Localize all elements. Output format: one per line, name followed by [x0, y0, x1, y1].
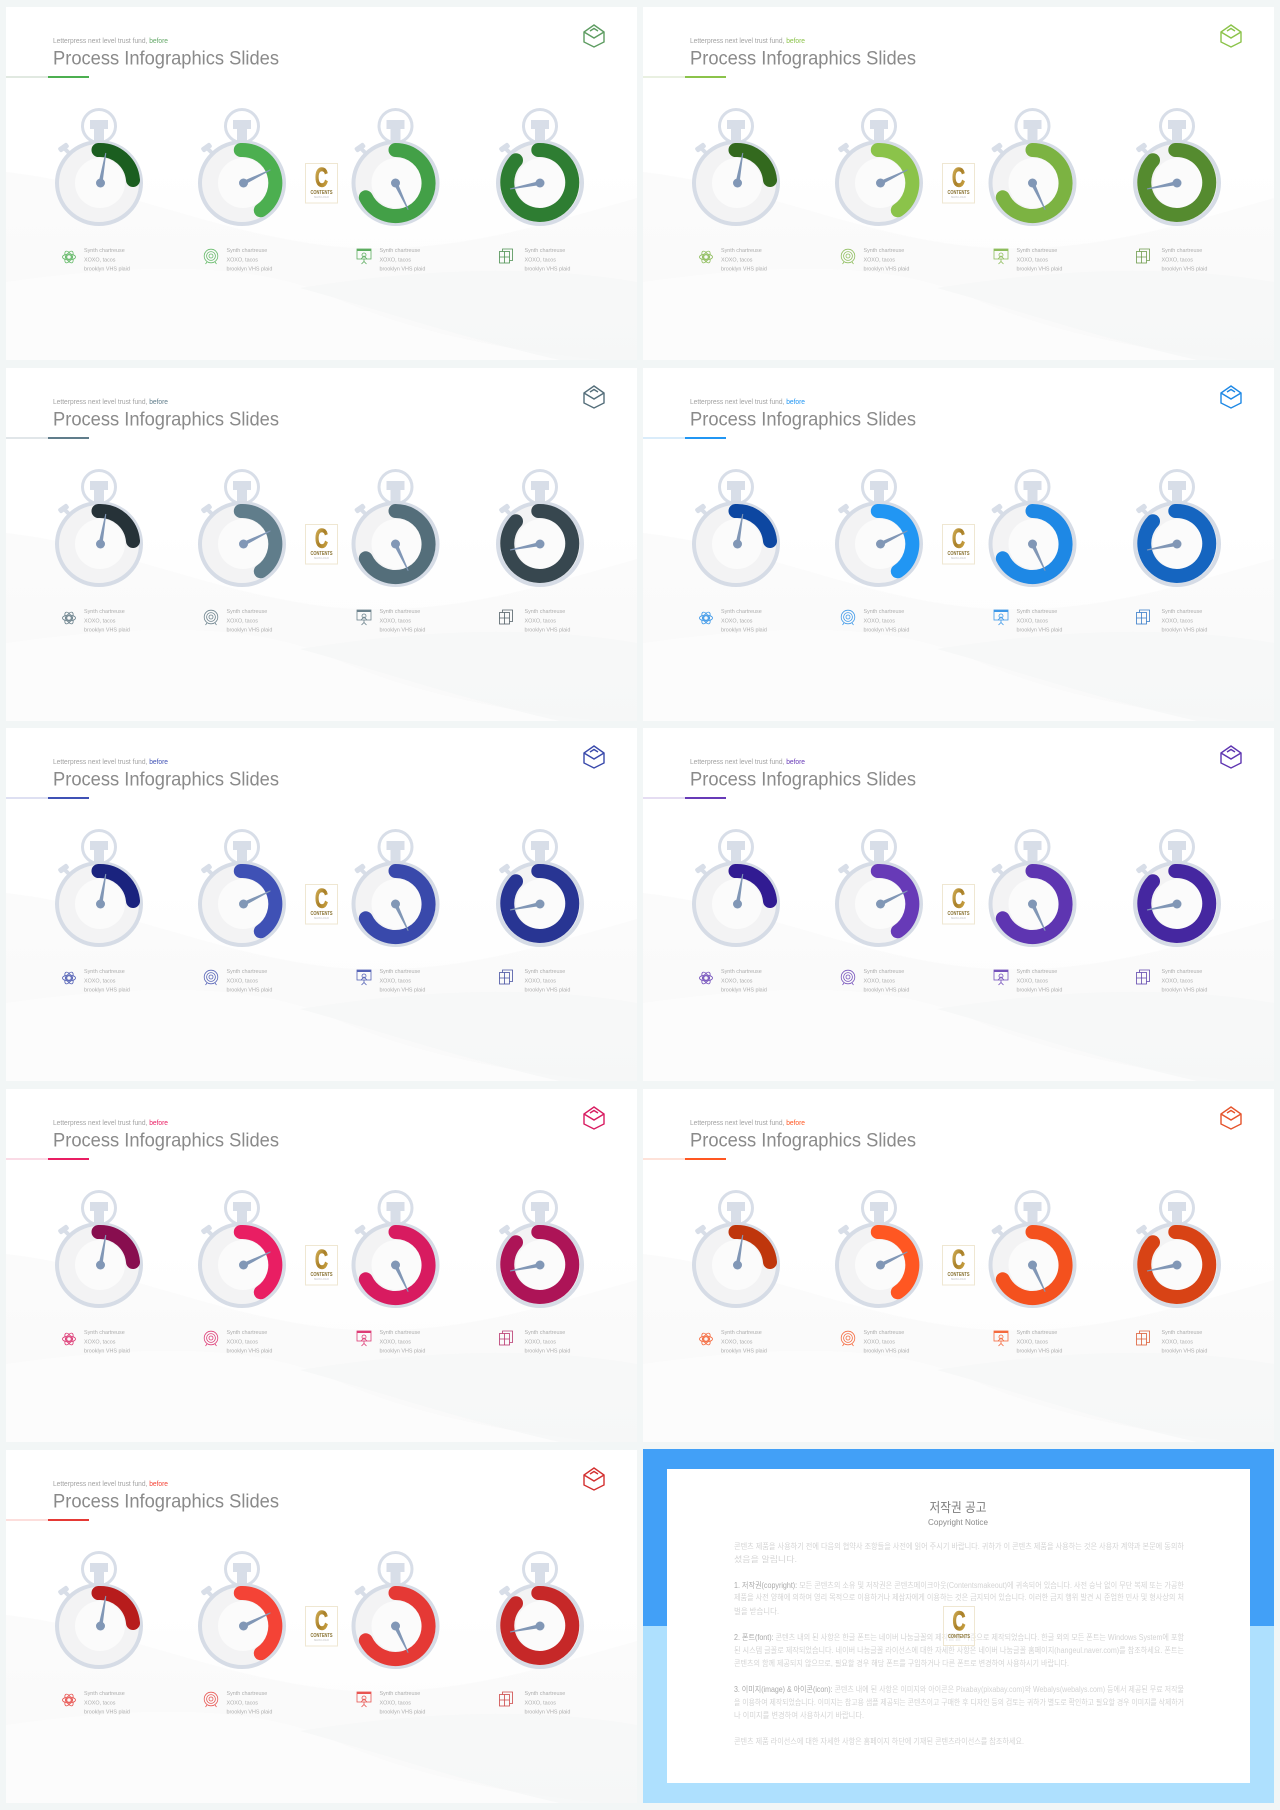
caption 4: brooklyn VHS plaid [1162, 628, 1207, 634]
caption 1: brooklyn VHS plaid [84, 1710, 130, 1716]
contents logo: C [315, 1244, 328, 1274]
icon: atom [62, 611, 76, 625]
caption 4: Synth chartreuse [1162, 609, 1202, 615]
icon: presentation [357, 970, 371, 985]
section 2: font: 된 시스템 글꼴로 제작되었습니다. 네이버 나눔글꼴 라이선스에 대한 자세한 사항은 네이버 나눔글꼴 홈페이지(hangeul.naver.com)를 참조하세요. 폰트는 [734, 1645, 1184, 1655]
icon: presentation [357, 1331, 371, 1346]
icon: layers [1136, 249, 1150, 263]
slide 6: deep purple [643, 728, 1274, 1081]
caption 1: XOXO, tacos [84, 258, 116, 264]
stopwatch 1 [694, 830, 778, 945]
caption 2: XOXO, tacos [226, 978, 258, 984]
caption 3: Synth chartreuse [380, 969, 420, 975]
notice heading: 저작권 공고 [930, 1500, 987, 1515]
caption 2: brooklyn VHS plaid [864, 1348, 909, 1354]
title underline [6, 1158, 89, 1160]
contents logo: MAIN LOGO [314, 556, 329, 560]
title underline [6, 797, 89, 799]
contents logo: C [952, 1244, 965, 1274]
contents logo: C [952, 524, 965, 554]
title: Process Infographics Slides [690, 408, 916, 430]
icon: cube logo [1221, 386, 1241, 408]
title: Process Infographics Slides [53, 1490, 279, 1512]
slide background [643, 728, 1274, 1081]
icon: layers [500, 249, 512, 263]
caption 1: XOXO, tacos [721, 258, 753, 264]
caption 3: XOXO, tacos [380, 1700, 411, 1706]
caption 2: XOXO, tacos [864, 978, 895, 984]
contents logo: C [315, 1606, 328, 1636]
contents logo [306, 884, 338, 924]
caption 3: Synth chartreuse [380, 609, 420, 615]
section 2: font: 2. 폰트(font): 콘텐츠 내의 된 사항은 한글 폰트는 네이버 나눔글꼴의 제작물을 기준으로 제작되었습니다. 한글 외의 모든 폰트는 Windows System에 포함 [734, 1633, 1236, 1642]
stopwatch 2 [837, 830, 921, 945]
stopwatch 3 [990, 470, 1074, 585]
stopwatch 2 [200, 1552, 284, 1667]
icon: layers [500, 610, 512, 624]
caption 3: Synth chartreuse [380, 248, 420, 254]
title: Process Infographics Slides [690, 1130, 916, 1152]
icon: target [204, 610, 218, 625]
contents logo: CONTENTS [310, 1633, 333, 1639]
caption 4: XOXO, tacos [524, 618, 556, 624]
caption 4: XOXO, tacos [1162, 618, 1193, 624]
caption 3: Synth chartreuse [380, 1330, 420, 1336]
icon: atom [700, 971, 712, 985]
subtitle: Letterpress next level trust fund, before [690, 1118, 805, 1127]
icon: target [204, 970, 218, 985]
contents logo: MAIN LOGO [951, 1277, 966, 1281]
contents logo [306, 1606, 338, 1646]
slide background [643, 368, 1274, 721]
caption 2: brooklyn VHS plaid [226, 266, 272, 272]
caption 2: XOXO, tacos [226, 258, 258, 264]
caption 3: brooklyn VHS plaid [1016, 1348, 1062, 1354]
closing line: 콘텐츠 제품 라이선스에 대한 자세한 사항은 홈페이지 하단에 기재된 콘텐츠라이선스를 참조하세요. [734, 1736, 1024, 1746]
icon: layers [1136, 610, 1150, 624]
slide 3: blue gray [6, 368, 637, 721]
icon: atom [700, 611, 712, 625]
caption 4: brooklyn VHS plaid [524, 1348, 570, 1354]
contents logo: CONTENTS [310, 551, 333, 557]
title underline [6, 1519, 89, 1521]
caption 2: brooklyn VHS plaid [226, 1348, 272, 1354]
caption 3: brooklyn VHS plaid [1016, 988, 1062, 994]
icon: presentation [994, 249, 1008, 264]
caption 2: Synth chartreuse [864, 969, 904, 975]
caption 1: XOXO, tacos [721, 978, 753, 984]
contents logo: CONTENTS [948, 911, 970, 917]
stopwatch 2 [837, 470, 921, 585]
stopwatch 2 [200, 830, 284, 945]
stopwatch 2 [200, 110, 284, 224]
subtitle: Letterpress next level trust fund, before [690, 397, 805, 406]
caption 1: brooklyn VHS plaid [84, 988, 130, 994]
section 1: copyright: 벌을 받습니다. [734, 1606, 779, 1616]
contents logo: CONTENTS [310, 911, 333, 917]
icon: target [204, 1331, 218, 1346]
caption 4: brooklyn VHS plaid [524, 988, 570, 994]
caption 3: Synth chartreuse [1016, 248, 1057, 254]
caption 3: brooklyn VHS plaid [380, 1710, 425, 1716]
stopwatch 2 [200, 1192, 284, 1306]
stopwatch 3 [354, 470, 438, 585]
caption 3: Synth chartreuse [1016, 609, 1057, 615]
caption 2: brooklyn VHS plaid [226, 628, 272, 634]
icon: atom [62, 250, 76, 264]
caption 2: Synth chartreuse [864, 248, 904, 254]
title: Process Infographics Slides [690, 48, 916, 70]
caption 1: brooklyn VHS plaid [721, 628, 767, 634]
caption 3: XOXO, tacos [380, 978, 411, 984]
caption 3: XOXO, tacos [1016, 618, 1048, 624]
caption 1: XOXO, tacos [84, 978, 116, 984]
subtitle: Letterpress next level trust fund, before [53, 757, 168, 766]
contents logo [306, 1244, 338, 1285]
icon: atom [700, 1332, 712, 1346]
stopwatch 1 [57, 1192, 141, 1306]
caption 4: Synth chartreuse [1162, 969, 1202, 975]
stopwatch 2 [837, 1192, 921, 1306]
icon: cube logo [584, 746, 604, 768]
icon: atom [62, 1693, 76, 1707]
stopwatch 3 [354, 1192, 438, 1306]
caption 2: brooklyn VHS plaid [226, 988, 272, 994]
stopwatch 1 [694, 470, 778, 585]
stopwatch 4 [498, 1192, 582, 1306]
stopwatch 4 [1135, 1192, 1219, 1306]
icon: atom [62, 971, 76, 985]
stopwatch 4 [498, 110, 582, 224]
icon: target [841, 970, 855, 985]
icon: layers [500, 1331, 512, 1345]
caption 4: Synth chartreuse [524, 609, 565, 615]
section 3: image and icon: 3. 이미지(image) & 아이콘(icon): 콘텐츠 내에 된 사항은 이미지와 아이콘은 Pixabay(pixabay.com)와 Webalys(webalys.com) 등에서 제공된 무료 저작물 [734, 1685, 1233, 1694]
subtitle: Letterpress next level trust fund, before [690, 757, 805, 766]
icon: presentation [994, 970, 1008, 985]
contents logo: C [952, 1606, 966, 1636]
caption 1: Synth chartreuse [721, 248, 762, 254]
contents logo: MAIN LOGO [951, 556, 966, 560]
caption 3: XOXO, tacos [380, 1340, 411, 1346]
caption 2: XOXO, tacos [864, 618, 895, 624]
section 1: copyright: 제품을 사전 양해에 의하여 영리 목적으로 이용하거나 제삼자에게 이용하는 것은 금지되어 있습니다. 이러한 금지 행위 발견 시 준엄한 민사 및 형사상의 처 [734, 1592, 1184, 1602]
icon: presentation [357, 249, 371, 264]
contents logo: C [315, 162, 328, 192]
icon: cube logo [1221, 1107, 1241, 1129]
stopwatch 4 [498, 1552, 582, 1667]
contents logo [944, 1606, 974, 1646]
icon: target [841, 249, 855, 264]
caption 3: XOXO, tacos [380, 258, 411, 264]
title: Process Infographics Slides [53, 768, 279, 790]
contents logo: MAIN LOGO [314, 1277, 329, 1281]
stopwatch 1 [57, 110, 141, 224]
caption 4: XOXO, tacos [524, 258, 556, 264]
contents logo: CONTENTS [948, 551, 970, 557]
caption 1: XOXO, tacos [84, 1700, 116, 1706]
icon: target [204, 249, 218, 264]
stopwatch 3 [990, 830, 1074, 945]
title underline [643, 437, 726, 439]
caption 1: Synth chartreuse [84, 1330, 125, 1336]
caption 1: Synth chartreuse [84, 248, 125, 254]
stopwatch 4 [1135, 110, 1219, 224]
icon: presentation [994, 610, 1008, 625]
subtitle: Letterpress next level trust fund, before [690, 36, 805, 45]
icon: atom [62, 1332, 76, 1346]
slide background [6, 7, 637, 360]
title: Process Infographics Slides [53, 48, 279, 70]
subtitle: Letterpress next level trust fund, before [53, 397, 168, 406]
contents logo [306, 524, 338, 564]
stopwatch 4 [498, 470, 582, 585]
title underline [643, 797, 726, 799]
contents logo [942, 162, 974, 203]
caption 3: brooklyn VHS plaid [380, 1348, 425, 1354]
caption 4: Synth chartreuse [1162, 248, 1202, 254]
caption 3: brooklyn VHS plaid [380, 628, 425, 634]
caption 3: brooklyn VHS plaid [1016, 628, 1062, 634]
slide background [6, 368, 637, 721]
caption 2: XOXO, tacos [864, 258, 895, 264]
caption 2: Synth chartreuse [226, 248, 267, 254]
slide 1: green [6, 7, 637, 360]
stopwatch 1 [57, 1552, 141, 1667]
slide 2: light green [643, 7, 1274, 360]
caption 4: brooklyn VHS plaid [1162, 988, 1207, 994]
icon: layers [1136, 970, 1150, 984]
contents logo: C [315, 884, 328, 914]
contents logo [942, 524, 974, 564]
section 1: copyright: 1. 저작권(copyright): 모든 콘텐츠의 소유 및 저작권은 콘텐츠메이크아웃(Contentsmakeout)에 귀속되어 있습니다. 사전 승낙 없이 무단 복제 또는 가공한 [734, 1581, 1232, 1590]
slide 10: copyright notice [643, 1449, 1274, 1803]
title: Process Infographics Slides [53, 408, 279, 430]
caption 2: brooklyn VHS plaid [864, 628, 909, 634]
caption 4: brooklyn VHS plaid [1162, 266, 1207, 272]
caption 4: Synth chartreuse [524, 1691, 565, 1697]
icon: layers [1136, 1331, 1150, 1345]
caption 4: Synth chartreuse [524, 248, 565, 254]
stopwatch 3 [354, 1552, 438, 1667]
caption 2: Synth chartreuse [226, 1330, 267, 1336]
stopwatch 2 [200, 470, 284, 585]
caption 1: brooklyn VHS plaid [721, 988, 767, 994]
blue background upper [643, 1449, 1274, 1626]
caption 2: XOXO, tacos [226, 1700, 258, 1706]
caption 2: XOXO, tacos [226, 618, 258, 624]
icon: target [204, 1692, 218, 1707]
contents logo: MAIN LOGO [951, 195, 966, 199]
caption 3: Synth chartreuse [380, 1691, 420, 1697]
caption 2: XOXO, tacos [864, 1340, 895, 1346]
intro paragraph: 셨음을 알립니다. [734, 1554, 797, 1564]
caption 4: Synth chartreuse [524, 1330, 565, 1336]
icon: layers [500, 1692, 512, 1706]
slide 8: deep orange [643, 1089, 1274, 1442]
contents logo [942, 1244, 974, 1285]
stopwatch 1 [57, 830, 141, 945]
caption 1: XOXO, tacos [721, 618, 753, 624]
caption 3: XOXO, tacos [1016, 258, 1048, 264]
contents logo: CONTENTS [948, 1634, 971, 1640]
slide background [6, 1450, 637, 1803]
caption 1: brooklyn VHS plaid [84, 628, 130, 634]
caption 3: XOXO, tacos [1016, 978, 1048, 984]
contents logo: CONTENTS [948, 190, 970, 196]
title: Process Infographics Slides [690, 768, 916, 790]
caption 2: Synth chartreuse [864, 1330, 904, 1336]
stopwatch 1 [694, 110, 778, 224]
contents logo: C [952, 884, 965, 914]
icon: cube logo [584, 25, 604, 47]
subtitle: Letterpress next level trust fund, before [53, 1118, 168, 1127]
contents logo [306, 162, 338, 203]
stopwatch 3 [990, 110, 1074, 224]
stopwatch 3 [354, 110, 438, 224]
title underline [6, 76, 89, 78]
icon: cube logo [1221, 746, 1241, 768]
caption 2: Synth chartreuse [226, 609, 267, 615]
icon: presentation [357, 610, 371, 625]
light blue background lower [643, 1626, 1274, 1803]
caption 1: brooklyn VHS plaid [721, 266, 767, 272]
contents logo: CONTENTS [310, 1272, 333, 1278]
caption 2: Synth chartreuse [226, 1691, 267, 1697]
caption 3: Synth chartreuse [1016, 1330, 1057, 1336]
section 3: image and icon: 을 이용하여 제작되었습니다. 이미지는 참고용 샘플 제공되는 콘텐츠이고 구매한 후 디자인 등의 검토는 귀하가 별도로 확인하고 필요할 경우 이미지를 삭제하거 [734, 1697, 1184, 1707]
slide 5: indigo [6, 728, 637, 1081]
title underline [643, 76, 726, 78]
caption 1: Synth chartreuse [721, 1330, 762, 1336]
section 2: font: 콘텐츠의 함께 제공되지 않으므로, 필요할 경우 해당 폰트를 구입하거나 다른 폰트로 변경하여 사용하시기 바랍니다. [734, 1658, 1069, 1668]
caption 4: brooklyn VHS plaid [1162, 1348, 1207, 1354]
title underline [643, 1158, 726, 1160]
caption 4: Synth chartreuse [524, 969, 565, 975]
caption 4: brooklyn VHS plaid [524, 266, 570, 272]
caption 2: Synth chartreuse [226, 969, 267, 975]
icon: cube logo [584, 1107, 604, 1129]
stopwatch 1 [694, 1192, 778, 1306]
slide background [643, 7, 1274, 360]
caption 3: brooklyn VHS plaid [380, 988, 425, 994]
caption 4: Synth chartreuse [1162, 1330, 1202, 1336]
icon: cube logo [1221, 25, 1241, 47]
subtitle: Letterpress next level trust fund, before [53, 1479, 168, 1488]
icon: target [841, 1331, 855, 1346]
caption 1: XOXO, tacos [84, 1340, 116, 1346]
contents logo [942, 884, 974, 924]
caption 4: XOXO, tacos [524, 1340, 556, 1346]
caption 1: Synth chartreuse [84, 1691, 125, 1697]
caption 1: XOXO, tacos [84, 618, 116, 624]
caption 4: XOXO, tacos [1162, 258, 1193, 264]
caption 1: brooklyn VHS plaid [84, 1348, 130, 1354]
slide background [6, 1089, 637, 1442]
caption 1: XOXO, tacos [721, 1340, 753, 1346]
caption 4: brooklyn VHS plaid [524, 1710, 570, 1716]
caption 3: brooklyn VHS plaid [380, 266, 425, 272]
caption 3: XOXO, tacos [380, 618, 411, 624]
icon: atom [700, 250, 712, 264]
stopwatch 4 [498, 830, 582, 945]
slide background [643, 1089, 1274, 1442]
caption 2: Synth chartreuse [864, 609, 904, 615]
contents logo: MAIN LOGO [314, 1638, 329, 1642]
intro paragraph: 콘텐츠 제품을 사용하기 전에 다음의 협약사 조항들을 사전에 읽어 주시기 바랍니다. 귀하가 이 콘텐츠 제품을 사용하는 것은 사용자 계약과 본문에 동의하 [734, 1541, 1185, 1551]
stopwatch 1 [57, 470, 141, 585]
icon: presentation [357, 1692, 371, 1707]
icon: presentation [994, 1331, 1008, 1346]
title: Process Infographics Slides [53, 1130, 279, 1152]
notice subheading: Copyright Notice [928, 1517, 988, 1527]
subtitle: Letterpress next level trust fund, before [53, 36, 168, 45]
caption 1: Synth chartreuse [84, 969, 125, 975]
caption 4: brooklyn VHS plaid [524, 628, 570, 634]
icon: target [841, 610, 855, 625]
stopwatch 2 [837, 110, 921, 224]
slide background [6, 728, 637, 1081]
section 3: image and icon: 나 이미지를 변경하여 사용하시기 바랍니다. [734, 1710, 864, 1720]
caption 1: Synth chartreuse [721, 969, 762, 975]
caption 1: brooklyn VHS plaid [84, 266, 130, 272]
stopwatch 4 [1135, 830, 1219, 945]
contents logo: MAIN LOGO [314, 916, 329, 920]
caption 2: brooklyn VHS plaid [864, 266, 909, 272]
caption 4: XOXO, tacos [1162, 978, 1193, 984]
contents logo: C [952, 162, 965, 192]
caption 2: brooklyn VHS plaid [864, 988, 909, 994]
caption 4: XOXO, tacos [524, 978, 556, 984]
stopwatch 4 [1135, 470, 1219, 585]
caption 3: brooklyn VHS plaid [1016, 266, 1062, 272]
title underline [6, 437, 89, 439]
slide 7: pink [6, 1089, 637, 1442]
caption 4: XOXO, tacos [524, 1700, 556, 1706]
slide 4: blue [643, 368, 1274, 721]
caption 3: Synth chartreuse [1016, 969, 1057, 975]
contents logo: CONTENTS [310, 190, 333, 196]
contents logo: MAIN LOGO [314, 195, 329, 199]
icon: layers [500, 970, 512, 984]
white notice panel [667, 1469, 1250, 1783]
caption 2: brooklyn VHS plaid [226, 1710, 272, 1716]
stopwatch 3 [354, 830, 438, 945]
caption 3: XOXO, tacos [1016, 1340, 1048, 1346]
icon: cube logo [584, 386, 604, 408]
contents logo: MAIN LOGO [951, 916, 966, 920]
contents logo: C [315, 524, 328, 554]
slide 9: red [6, 1450, 637, 1803]
caption 2: XOXO, tacos [226, 1340, 258, 1346]
contents logo: CONTENTS [948, 1272, 970, 1278]
caption 1: brooklyn VHS plaid [721, 1348, 767, 1354]
icon: cube logo [584, 1468, 604, 1490]
caption 4: XOXO, tacos [1162, 1340, 1193, 1346]
caption 1: Synth chartreuse [84, 609, 125, 615]
caption 1: Synth chartreuse [721, 609, 762, 615]
stopwatch 3 [990, 1192, 1074, 1306]
